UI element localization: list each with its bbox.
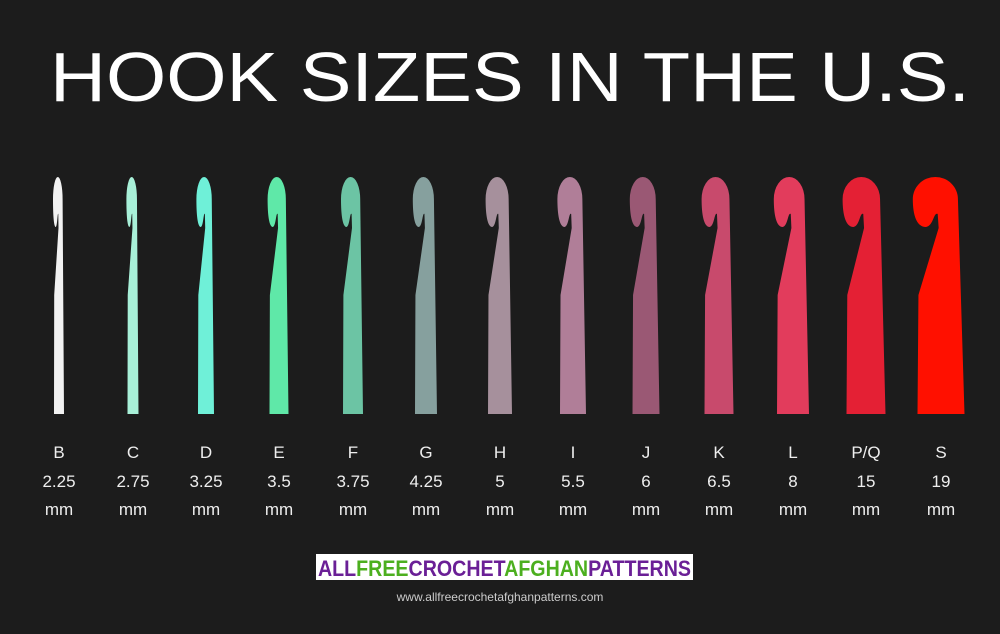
hook E bbox=[268, 177, 288, 414]
size labels: C bbox=[127, 443, 139, 462]
hook D bbox=[196, 177, 214, 414]
size labels: P/Q bbox=[851, 443, 881, 462]
size labels: mm bbox=[339, 500, 367, 519]
size labels: mm bbox=[412, 500, 440, 519]
hook I bbox=[557, 177, 586, 414]
size labels: 4.25 bbox=[409, 472, 443, 491]
hook H bbox=[486, 177, 512, 414]
size labels: mm bbox=[927, 500, 955, 519]
size labels: B bbox=[53, 443, 65, 462]
size labels: mm bbox=[852, 500, 880, 519]
size labels: G bbox=[419, 443, 433, 462]
hook B bbox=[53, 177, 64, 414]
size labels: L bbox=[788, 443, 798, 462]
size labels: H bbox=[494, 443, 506, 462]
size labels: 3.25 bbox=[189, 472, 223, 491]
size labels: mm bbox=[632, 500, 660, 519]
hook S bbox=[913, 177, 964, 414]
hook F bbox=[341, 177, 363, 414]
size labels: mm bbox=[705, 500, 733, 519]
hook L bbox=[774, 177, 809, 414]
size labels: mm bbox=[779, 500, 807, 519]
size labels: mm bbox=[265, 500, 293, 519]
size labels: 2.75 bbox=[116, 472, 150, 491]
size labels: 6.5 bbox=[707, 472, 731, 491]
hook J bbox=[630, 177, 660, 414]
size labels: mm bbox=[486, 500, 514, 519]
size labels: J bbox=[642, 443, 650, 462]
size labels: 2.25 bbox=[42, 472, 76, 491]
hook C bbox=[126, 177, 138, 414]
hook K bbox=[702, 177, 734, 414]
size labels: 6 bbox=[641, 472, 651, 491]
size labels: 3.75 bbox=[336, 472, 370, 491]
hook P/Q bbox=[843, 177, 886, 414]
size labels bbox=[42, 443, 955, 519]
size labels: K bbox=[713, 443, 725, 462]
size labels: mm bbox=[559, 500, 587, 519]
size labels: 5.5 bbox=[561, 472, 585, 491]
hook G bbox=[413, 177, 437, 414]
size labels: mm bbox=[45, 500, 73, 519]
size labels: 8 bbox=[788, 472, 798, 491]
size labels: 19 bbox=[932, 472, 950, 491]
size labels: D bbox=[200, 443, 212, 462]
size labels: S bbox=[935, 443, 947, 462]
size labels: F bbox=[348, 443, 358, 462]
logo: ALLFREECROCHETAFGHANPATTERNS bbox=[318, 556, 691, 581]
size labels: mm bbox=[192, 500, 220, 519]
size labels: 5 bbox=[495, 472, 505, 491]
url: www.allfreecrochetafghanpatterns.com bbox=[396, 590, 603, 604]
size labels: 15 bbox=[857, 472, 875, 491]
size labels: 3.5 bbox=[267, 472, 291, 491]
size labels: mm bbox=[119, 500, 147, 519]
size labels: I bbox=[571, 443, 575, 462]
hooks chart bbox=[53, 177, 964, 414]
size labels: E bbox=[273, 443, 285, 462]
title: HOOK SIZES IN THE U.S. bbox=[50, 38, 970, 116]
